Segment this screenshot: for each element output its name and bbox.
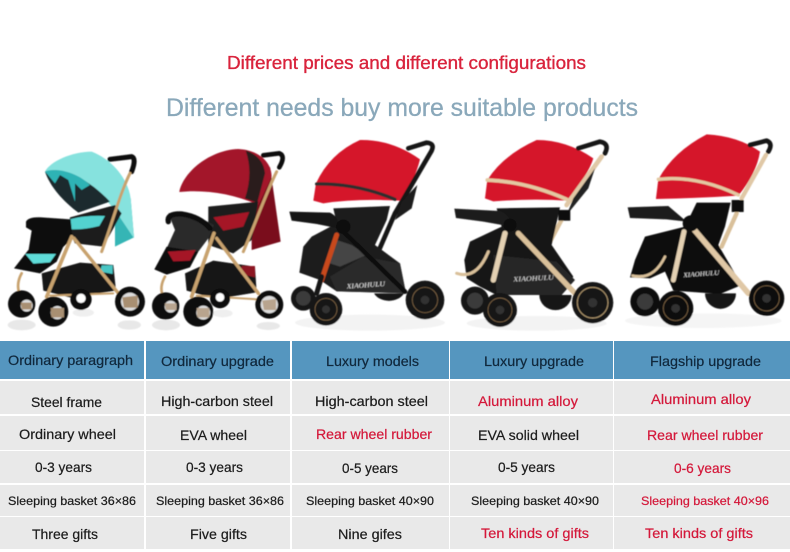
row: gifts: Ten kinds of gifts [645,525,753,541]
row: frame material: Steel frame [31,394,102,410]
row: sleeping basket size [0,485,790,516]
row: gifts: Three gifts [32,526,98,542]
row: sleeping basket size: Sleeping basket 36×86 [156,494,284,508]
stroller 4: red luxury upgrade gold frame [454,140,613,331]
row: wheels: EVA solid wheel [478,427,579,443]
stroller 1: teal ordinary [8,152,145,330]
row: gifts: Nine gifes [338,526,402,542]
row: age range: 0-3 years [35,459,92,475]
row: age range: 0-5 years [498,459,555,475]
brand mark: XIAOHULU [682,270,721,279]
row: frame material: High-carbon steel [315,393,428,409]
stroller 5: red flagship gold frame [625,134,784,328]
row: gifts [0,517,790,549]
header row: Ordinary upgrade [161,353,274,369]
header row: Luxury models [326,353,419,369]
comparison table [0,341,790,549]
row: wheels: Rear wheel rubber [647,427,763,443]
row: wheels: Rear wheel rubber [316,426,432,442]
row: sleeping basket size: Sleeping basket 36×86 [8,494,136,508]
row: sleeping basket size: Sleeping basket 40×90 [471,494,599,508]
row: wheels [0,416,790,450]
row: frame material: Aluminum alloy [478,393,578,409]
row: wheels: EVA wheel [180,427,247,443]
brand mark: XIAOHULU [345,280,386,291]
row: frame material: High-carbon steel [161,393,273,409]
row: frame material: Aluminum alloy [651,391,751,407]
header row: Luxury upgrade [484,353,584,369]
row: wheels: Ordinary wheel [19,426,116,442]
row: gifts: Ten kinds of gifts [481,525,589,541]
row: sleeping basket size: Sleeping basket 40×90 [306,494,434,508]
row: gifts: Five gifts [190,526,247,542]
row: sleeping basket size: Sleeping basket 40×96 [641,494,769,508]
row: age range [0,451,790,483]
header row: Flagship upgrade [650,353,761,369]
stroller 3: red luxury black frame [289,140,445,331]
row: age range: 0-3 years [186,459,243,475]
header row: Ordinary paragraph [8,352,133,368]
row: frame material [0,381,790,414]
stroller 2: dark red ordinary upgrade [152,149,283,330]
row: age range: 0-5 years [342,460,398,476]
title: red headline: Different prices and different configurations [227,53,586,73]
subtitle: blue-grey headline: Different needs buy more suitable products [166,94,638,122]
header row [0,341,790,379]
row: age range: 0-6 years [674,460,731,476]
brand mark: XIAOHULU [512,274,555,284]
